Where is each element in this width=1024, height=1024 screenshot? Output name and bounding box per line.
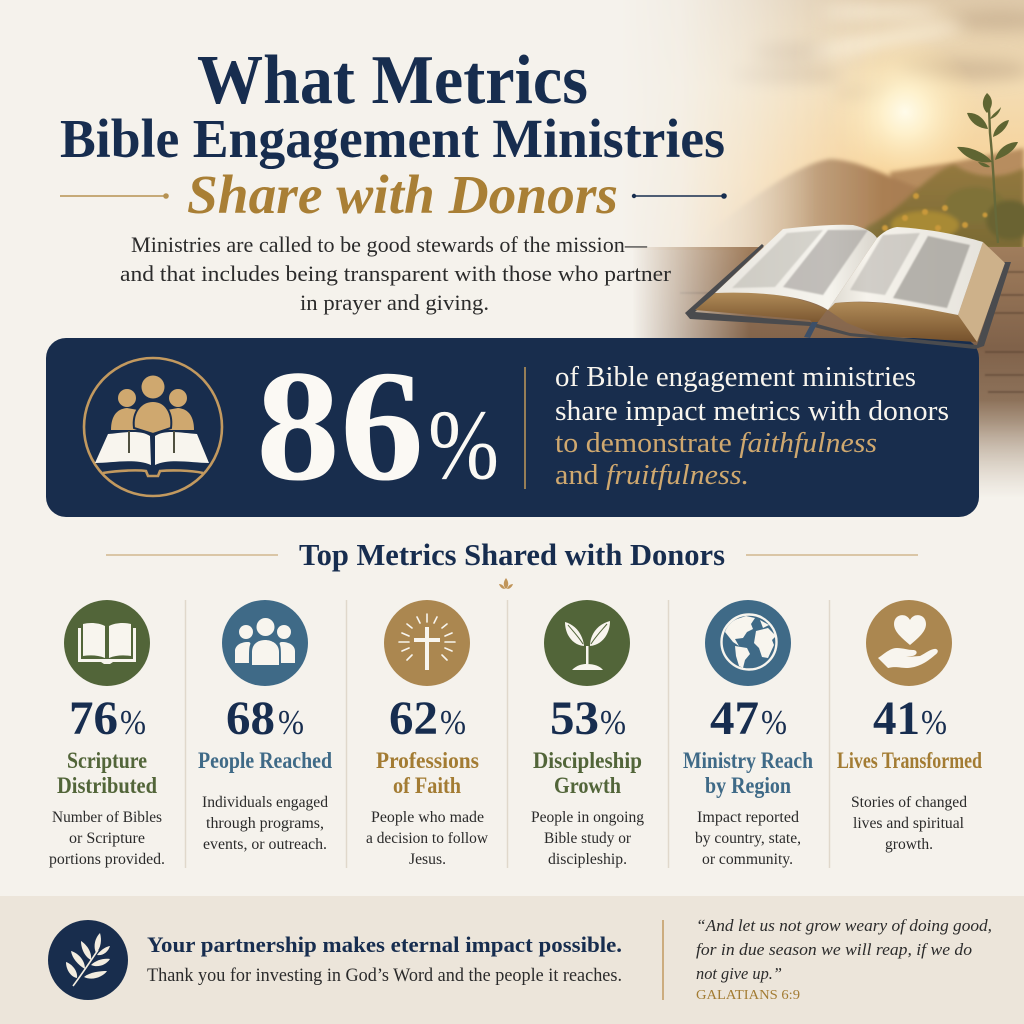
description: or community. <box>702 851 793 868</box>
description <box>366 809 488 868</box>
thank-you message: Thank you for investing in God’s Word and the people it reaches. <box>147 965 622 986</box>
shrubs <box>860 165 1024 250</box>
section heading <box>106 537 918 589</box>
metric: Scripture Distributed <box>49 600 165 868</box>
title: Share with Donors <box>187 164 618 225</box>
description: events, or outreach. <box>203 836 327 853</box>
panel: 86 percent banner <box>46 338 979 517</box>
description: lives and spiritual <box>853 815 965 832</box>
mountain <box>742 156 916 247</box>
plant <box>957 93 1018 243</box>
description: growth. <box>885 836 933 853</box>
description: or Scripture <box>69 830 145 847</box>
label <box>376 748 479 798</box>
description <box>695 809 801 868</box>
big number 86%: % <box>428 389 499 500</box>
value: % <box>761 703 787 742</box>
open Bible <box>685 225 1011 349</box>
description <box>49 809 165 868</box>
big number 86%: 86 <box>256 338 424 514</box>
label <box>57 748 157 798</box>
big number 86% <box>256 338 499 514</box>
icon: sprout <box>544 600 630 686</box>
icon: heart in hand <box>866 600 952 686</box>
scripture quote: for in due season we will reap, if we do <box>696 940 972 959</box>
wooden table <box>620 247 1024 497</box>
value <box>550 692 626 745</box>
label: by Region <box>705 773 791 798</box>
sky with clouds and sun <box>662 0 1024 250</box>
metric: Lives Transformed <box>837 600 982 853</box>
banner statement: share impact metrics with donors <box>555 396 949 427</box>
icon: book <box>64 600 150 686</box>
scripture quote <box>696 916 992 1003</box>
description: Jesus. <box>409 851 446 868</box>
description: discipleship. <box>548 851 627 868</box>
description: a decision to follow <box>366 830 488 847</box>
scripture quote: “And let us not grow weary of doing good, <box>696 916 992 935</box>
cover <box>685 244 1011 349</box>
value: % <box>600 703 626 742</box>
title: What Metrics <box>197 42 588 119</box>
intro text: Ministries are called to be good stewards of the mission— <box>131 232 648 257</box>
distant hill <box>890 148 1024 240</box>
label: Distributed <box>57 773 157 798</box>
section heading: Top Metrics Shared with Donors <box>299 537 725 572</box>
value <box>873 692 947 745</box>
label: Ministry Reach <box>683 748 813 773</box>
description <box>202 794 328 853</box>
value: 76 <box>69 692 118 745</box>
ribbon <box>804 322 818 338</box>
icon: people over open book <box>84 358 222 496</box>
icon: people <box>222 600 308 686</box>
value <box>389 692 466 745</box>
title: Bible Engagement Ministries <box>60 108 725 169</box>
value <box>710 692 787 745</box>
metric: People Reached <box>198 600 332 853</box>
metric: Professions of Faith <box>366 600 488 868</box>
title rule left <box>60 193 169 199</box>
value <box>69 692 146 745</box>
label: Professions <box>376 748 479 773</box>
description <box>531 809 644 868</box>
banner statement: to demonstrate faithfulness <box>555 428 877 459</box>
intro text: and that includes being transparent with those who partner <box>120 261 672 286</box>
label: Lives Transformed <box>837 748 982 773</box>
page edges <box>695 292 827 326</box>
description <box>851 794 967 853</box>
description: Impact reported <box>697 809 799 826</box>
label: Growth <box>554 773 621 798</box>
label <box>683 748 813 798</box>
panel: footer <box>0 896 1024 1024</box>
description: People who made <box>371 809 484 826</box>
hero photo: sunrise, mountains and table <box>620 0 1024 497</box>
description: Number of Bibles <box>52 809 162 826</box>
scripture quote: GALATIANS 6:9 <box>696 988 800 1003</box>
value: 62 <box>389 692 438 745</box>
value: % <box>921 703 947 742</box>
banner statement: of Bible engagement ministries <box>555 362 916 393</box>
value: % <box>278 703 304 742</box>
title <box>60 42 725 225</box>
thank-you message <box>147 932 622 986</box>
intro text <box>120 232 672 315</box>
label: of Faith <box>393 773 461 798</box>
value: % <box>120 703 146 742</box>
banner statement: and fruitfulness. <box>555 460 749 491</box>
value: 68 <box>226 692 275 745</box>
value: 41 <box>873 692 920 745</box>
label: People Reached <box>198 748 332 773</box>
banner statement <box>555 362 949 491</box>
icon: globe <box>705 600 791 686</box>
icon: radiant cross <box>384 600 470 686</box>
label: Discipleship <box>533 748 642 773</box>
metric: Ministry Reach by Region <box>683 600 813 868</box>
intro text: in prayer and giving. <box>300 290 489 315</box>
value <box>226 692 304 745</box>
description: People in ongoing <box>531 809 644 826</box>
value: % <box>440 703 466 742</box>
printed text blocks <box>732 230 970 308</box>
value: 47 <box>710 692 759 745</box>
description: Stories of changed <box>851 794 967 811</box>
description: Individuals engaged <box>202 794 328 811</box>
icon: leafy branch <box>48 920 128 1000</box>
title rule right <box>632 193 727 199</box>
description: through programs, <box>206 815 324 832</box>
description: Bible study or <box>544 830 632 847</box>
description: by country, state, <box>695 830 801 847</box>
description: portions provided. <box>49 851 165 868</box>
label <box>533 748 642 798</box>
pages <box>715 225 877 310</box>
value: 53 <box>550 692 599 745</box>
label: Scripture <box>67 748 147 773</box>
scripture quote: not give up.” <box>696 964 782 983</box>
metric: Discipleship Growth <box>531 600 644 868</box>
thank-you message: Your partnership makes eternal impact possible. <box>147 932 622 957</box>
